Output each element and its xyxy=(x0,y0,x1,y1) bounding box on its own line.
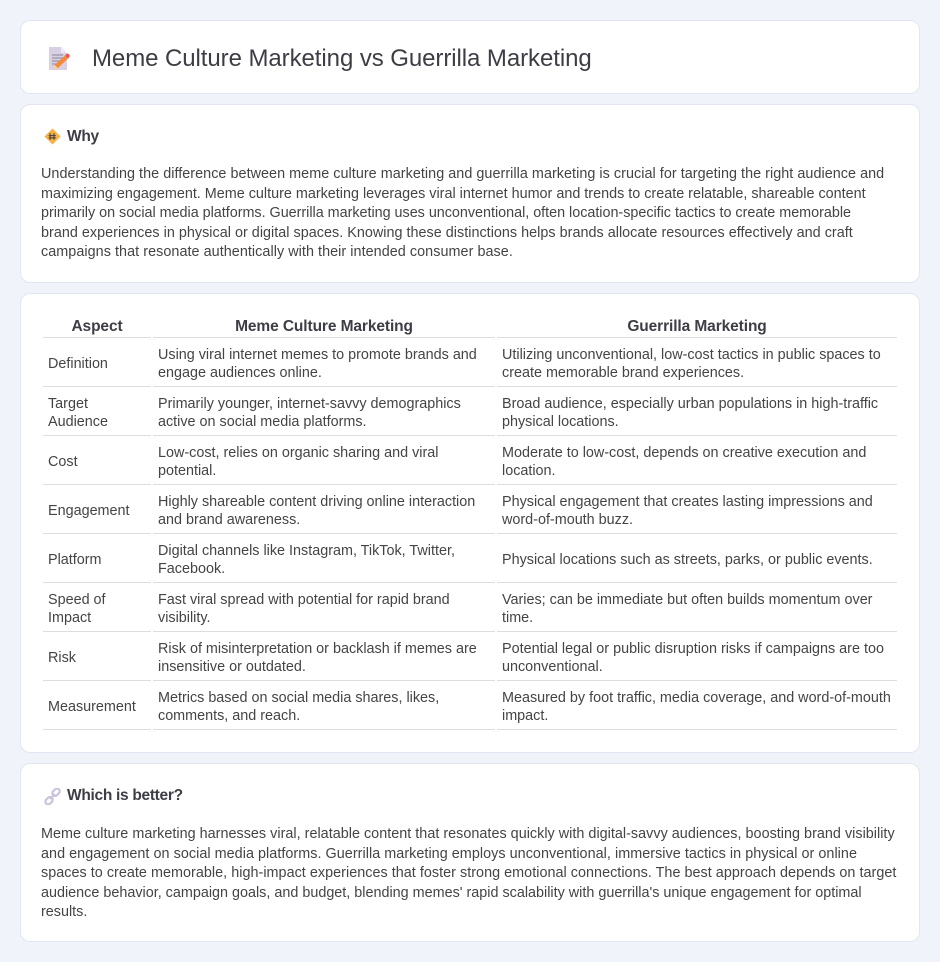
text block: verdict: and engagement on social media platforms. Guerrilla marketing employs unconventional, immersive tactics in physical or online xyxy=(41,846,857,862)
comparison table: Moderate to low-cost, depends on creative execution and xyxy=(502,445,866,461)
comparison table: Fast viral spread with potential for rapid brand xyxy=(158,592,450,608)
comparison table: Digital channels like Instagram, TikTok, Twitter, xyxy=(158,543,455,559)
comparison table: Measurement xyxy=(48,699,136,715)
comparison table: Definition xyxy=(48,356,108,372)
text block: verdict xyxy=(41,826,896,920)
comparison table: Low-cost, relies on organic sharing and viral xyxy=(158,445,438,461)
comparison table: active on social media platforms. xyxy=(158,414,367,430)
panel: why xyxy=(20,104,920,283)
comparison table: location. xyxy=(502,463,556,479)
comparison table: Impact xyxy=(48,610,91,626)
text block: why explanation: brand experiences in physical or digital spaces. Knowing these distinctions helps brands allocate resources effectively and craft xyxy=(41,225,853,241)
text block: why explanation: campaigns that resonate authentically with their intended consumer base. xyxy=(41,244,513,260)
icon: chain link xyxy=(44,788,61,805)
text block: why explanation: maximizing engagement. Meme culture marketing leverages viral internet humor and trends to create relatable, shareable content xyxy=(41,186,866,202)
comparison table: Utilizing unconventional, low-cost tactics in public spaces to xyxy=(502,347,881,363)
comparison table: comments, and reach. xyxy=(158,708,300,724)
comparison table: Aspect xyxy=(71,318,123,334)
comparison table: visibility. xyxy=(158,610,210,626)
comparison table: create memorable brand experiences. xyxy=(502,365,744,381)
comparison table: potential. xyxy=(158,463,216,479)
comparison table: Measured by foot traffic, media coverage, and word-of-mouth xyxy=(502,690,891,706)
title: Meme Culture Marketing vs Guerrilla Marketing xyxy=(92,45,592,72)
comparison table: engage audiences online. xyxy=(158,365,322,381)
comparison table: Varies; can be immediate but often builds momentum over xyxy=(502,592,872,608)
comparison table: Physical locations such as streets, parks, or public events. xyxy=(502,552,873,568)
comparison table: Highly shareable content driving online interaction xyxy=(158,494,475,510)
panel: which is better xyxy=(20,763,920,942)
comparison table: Engagement xyxy=(48,503,130,519)
comparison table: impact. xyxy=(502,708,548,724)
comparison table: insensitive or outdated. xyxy=(158,659,306,675)
comparison table: Audience xyxy=(48,414,108,430)
comparison table: unconventional. xyxy=(502,659,603,675)
comparison table: time. xyxy=(502,610,533,626)
comparison table: Primarily younger, internet-savvy demographics xyxy=(158,396,461,412)
comparison table: Facebook. xyxy=(158,561,225,577)
panel: title header xyxy=(20,20,920,94)
text block: why explanation: primarily on social media platforms. Guerrilla marketing uses unconventional, often location-specific tactics to create memorable xyxy=(41,205,851,221)
heading: why: Why xyxy=(67,128,99,145)
comparison table: Metrics based on social media shares, likes, xyxy=(158,690,439,706)
text block: verdict: Meme culture marketing harnesses viral, relatable content that resonates quickly with digital-savvy audiences, boosting brand visibility xyxy=(41,826,895,842)
icon: document with pencil xyxy=(49,47,70,70)
icon: warning diamond xyxy=(44,128,60,144)
comparison table: and brand awareness. xyxy=(158,512,300,528)
comparison table: Target xyxy=(48,396,88,412)
comparison table: Platform xyxy=(48,552,102,568)
text block: verdict: spaces to create memorable, high-impact experiences that foster strong emotional connections. The best approach depends on target xyxy=(41,865,896,881)
heading: which is better: Which is better? xyxy=(67,787,183,804)
comparison table: word-of-mouth buzz. xyxy=(502,512,633,528)
text block: verdict: audience behavior, campaign goals, and budget, blending memes' rapid scalability with guerrilla's unique engagement for optimal xyxy=(41,885,862,901)
comparison table: Guerrilla Marketing xyxy=(627,318,767,334)
panel: comparison table xyxy=(20,293,920,753)
comparison table: Physical engagement that creates lasting impressions and xyxy=(502,494,873,510)
comparison table: Broad audience, especially urban populations in high-traffic xyxy=(502,396,878,412)
comparison table: Using viral internet memes to promote brands and xyxy=(158,347,477,363)
comparison table xyxy=(43,318,897,730)
text block: verdict: results. xyxy=(41,904,87,920)
comparison table: Speed of xyxy=(48,592,106,608)
comparison table: Risk of misinterpretation or backlash if memes are xyxy=(158,641,477,657)
comparison table: Potential legal or public disruption risks if campaigns are too xyxy=(502,641,884,657)
comparison table: Cost xyxy=(48,454,78,470)
text block: why explanation: Understanding the difference between meme culture marketing and guerrilla marketing is crucial for targeting the right audience and xyxy=(41,166,884,182)
comparison table: Meme Culture Marketing xyxy=(235,318,413,334)
text block: why explanation xyxy=(41,166,884,260)
comparison table: Risk xyxy=(48,650,76,666)
comparison table: physical locations. xyxy=(502,414,619,430)
